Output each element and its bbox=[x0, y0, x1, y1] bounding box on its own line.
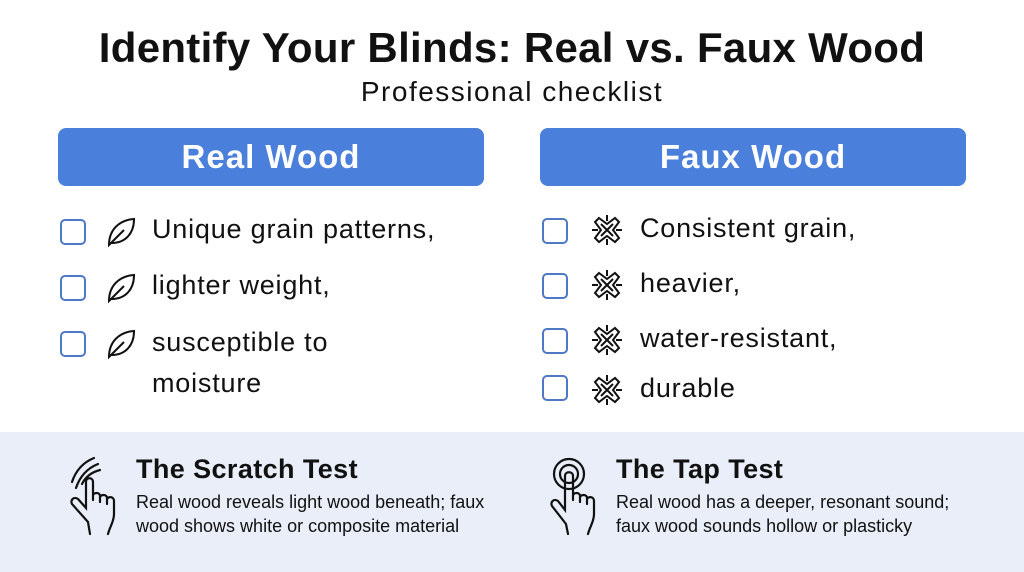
body bbox=[136, 492, 484, 536]
item 3: susceptible to bbox=[152, 327, 328, 357]
item 1: Unique grain patterns, bbox=[152, 214, 435, 244]
panel: tap test bbox=[550, 454, 949, 536]
item 3: moisture bbox=[152, 368, 262, 398]
item 1 bbox=[542, 213, 856, 245]
item 3 bbox=[542, 323, 837, 355]
body: faux wood sounds hollow or plasticky bbox=[616, 516, 912, 536]
header: faux wood bbox=[540, 128, 966, 186]
item 3 bbox=[60, 327, 328, 398]
body: wood shows white or composite material bbox=[136, 516, 459, 536]
item 2 bbox=[542, 268, 741, 300]
panel: scratch test bbox=[70, 454, 484, 536]
item 1 bbox=[60, 214, 435, 248]
body bbox=[616, 492, 949, 536]
item 4: durable bbox=[640, 373, 736, 403]
body: Real wood has a deeper, resonant sound; bbox=[616, 492, 949, 512]
item 2: lighter weight, bbox=[152, 270, 331, 300]
heading: The Tap Test bbox=[616, 454, 783, 484]
panel: faux wood list bbox=[542, 213, 856, 405]
item 2: heavier, bbox=[640, 268, 741, 298]
heading: The Scratch Test bbox=[136, 454, 358, 484]
item 1: Consistent grain, bbox=[640, 213, 856, 243]
subtitle: Professional checklist bbox=[361, 76, 663, 107]
panel: real wood list bbox=[60, 214, 435, 398]
header: real wood: Real Wood bbox=[182, 138, 360, 175]
item 2 bbox=[60, 270, 331, 304]
header: real wood bbox=[58, 128, 484, 186]
body: Real wood reveals light wood beneath; faux bbox=[136, 492, 484, 512]
icon: hand tap bbox=[550, 458, 596, 536]
header: faux wood: Faux Wood bbox=[660, 138, 846, 175]
bottom band bbox=[0, 432, 1024, 572]
item 3: water-resistant, bbox=[640, 323, 837, 353]
icon: hand scratch bbox=[70, 456, 116, 536]
title: Identify Your Blinds: Real vs. Faux Wood bbox=[99, 24, 925, 71]
item 4 bbox=[542, 373, 736, 405]
